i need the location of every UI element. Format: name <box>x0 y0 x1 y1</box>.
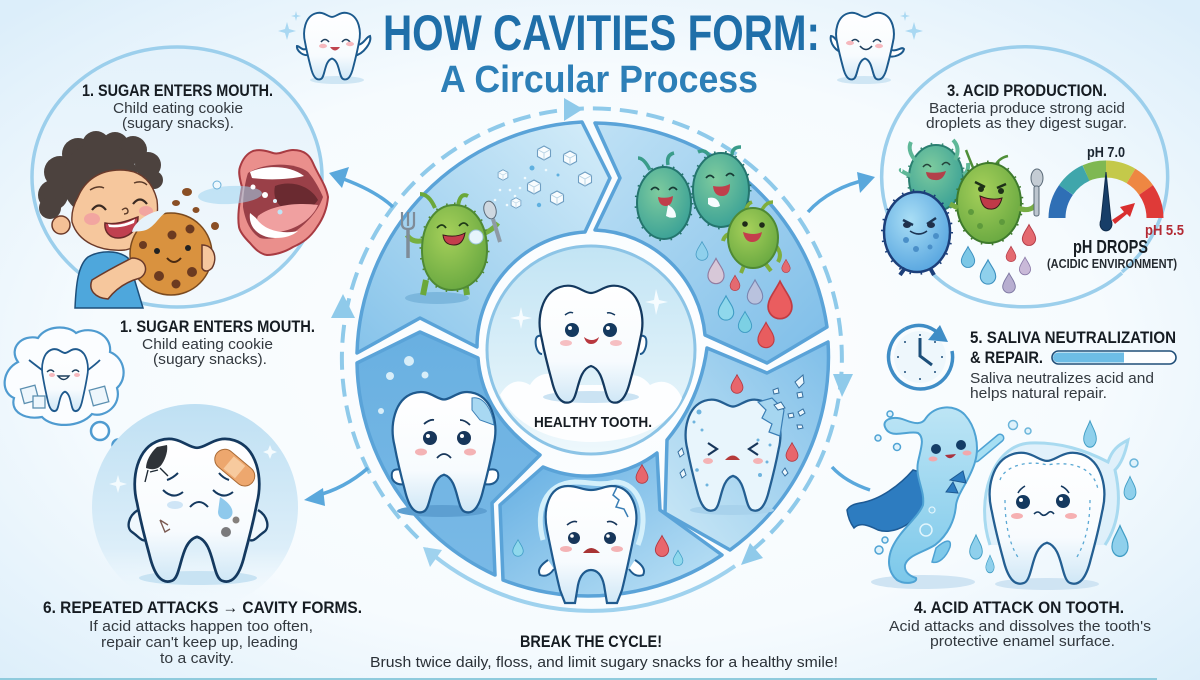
icon: shielded sad tooth <box>513 465 683 603</box>
panel: acid production <box>882 47 1184 307</box>
text: step 3 description: Bacteria produce strong acid <box>929 100 1125 117</box>
title: A Circular Process <box>440 59 758 101</box>
icon: three bacteria <box>884 140 1043 275</box>
progress bar <box>1052 351 1176 364</box>
label: healthy tooth: HEALTHY TOOTH. <box>534 414 652 431</box>
icon: smiling tooth right <box>831 11 923 84</box>
heading: break the cycle: BREAK THE CYCLE! <box>520 632 662 651</box>
text: step 4 description <box>889 618 1151 650</box>
icon: tooth under repair <box>970 420 1138 590</box>
heading: step 3: 3. ACID PRODUCTION. <box>947 81 1107 100</box>
text: step 5 description: Saliva neutralizes acid and <box>970 370 1154 387</box>
arrow: to step 1 <box>329 167 393 207</box>
chart: pH gauge <box>1047 144 1184 271</box>
icon: thought cloud <box>5 328 124 450</box>
heading: step 6: 6. REPEATED ATTACKS → CAVITY FORMS. <box>43 598 362 617</box>
arrow: toward saliva <box>832 467 870 490</box>
icon: sad tooth with cavity and bandage <box>129 439 267 582</box>
title: HOW CAVITIES FORM: <box>383 5 820 61</box>
label: pH drops: pH DROPS <box>1073 237 1148 257</box>
text: step 5 description <box>970 370 1154 402</box>
text: step 6 description: to a cavity. <box>160 650 234 667</box>
text: step 3 description: droplets as they digest sugar. <box>926 115 1127 132</box>
icon: open mouth <box>238 150 328 255</box>
icon: hungry green bacterium <box>402 194 500 304</box>
heading: step 5: 5. SALIVA NEUTRALIZATION <box>970 328 1176 347</box>
heading: step 1: 1. SUGAR ENTERS MOUTH. <box>82 81 273 100</box>
text: step 1 description: (sugary snacks). <box>122 115 234 132</box>
text: step 5 description: helps natural repair. <box>970 385 1107 402</box>
face <box>72 170 158 250</box>
heading: step 5: & REPAIR. <box>970 348 1043 367</box>
heading: step 4: 4. ACID ATTACK ON TOOTH. <box>914 598 1124 617</box>
segment: acid-producing bacteria <box>595 123 827 363</box>
panel: cavity forms <box>92 404 298 610</box>
title <box>383 5 820 101</box>
icon: sugar cubes <box>494 146 592 208</box>
segment: weakened tooth <box>500 453 722 603</box>
text: repeated step 1 caption: Child eating cookie <box>142 336 273 353</box>
panel: central cycle wheel <box>357 122 828 603</box>
icon: acid droplets <box>961 225 1036 293</box>
hub: healthy tooth <box>487 246 695 454</box>
dashed cycle ring <box>331 98 853 611</box>
icon: worried chipped tooth <box>378 356 498 517</box>
text: step 6 description <box>89 618 313 667</box>
text: break the cycle advice: Brush twice daily, floss, and limit sugary snacks for a healthy smile! <box>370 654 838 671</box>
bottom rule <box>0 678 1157 680</box>
text: repeated step 1 caption <box>120 317 315 368</box>
segment: enamel erosion <box>665 342 828 550</box>
label: pH 7.0: pH 7.0 <box>1087 144 1125 161</box>
text: step 6 description: repair can't keep up, leading <box>101 634 298 651</box>
segment: worried tooth <box>357 332 540 575</box>
segment: sugar feeds bacteria <box>357 122 610 353</box>
text: step 4 description: protective enamel surface. <box>930 633 1115 650</box>
icon: sugar crumbs spray <box>198 181 282 214</box>
icon: grinning green bacterium <box>723 202 780 273</box>
text: step 3 description <box>926 100 1127 132</box>
arrow: to step 6 <box>304 468 368 506</box>
icon: happy tooth <box>536 286 646 403</box>
heading: step 5 <box>970 328 1176 367</box>
text: step 1 description <box>113 100 243 132</box>
text: repeated step 1 caption: (sugary snacks). <box>153 351 267 368</box>
label: acidic environment: (ACIDIC ENVIRONMENT) <box>1047 257 1177 271</box>
icon: clock with arrow <box>889 325 953 389</box>
icon: cloud <box>500 374 682 442</box>
text: step 4 description: Acid attacks and dissolves the tooth's <box>889 618 1151 635</box>
text: repeated step 1 caption: 1. SUGAR ENTERS MOUTH. <box>120 317 315 336</box>
panel: sugar enters mouth <box>32 47 328 308</box>
label: pH 5.5: pH 5.5 <box>1145 222 1184 239</box>
text: step 6 description: If acid attacks happen too often, <box>89 618 313 635</box>
icon: waving tooth left <box>278 11 370 84</box>
icon: acid drops <box>696 242 792 348</box>
icon: child eating cookie <box>38 131 219 308</box>
text: step 1 description: Child eating cookie <box>113 100 243 117</box>
arrow: to step 3 <box>808 172 875 212</box>
icon: two teal bacteria <box>637 147 749 239</box>
icon: eroding tooth <box>678 375 805 515</box>
icon: saliva superhero <box>847 407 1000 589</box>
